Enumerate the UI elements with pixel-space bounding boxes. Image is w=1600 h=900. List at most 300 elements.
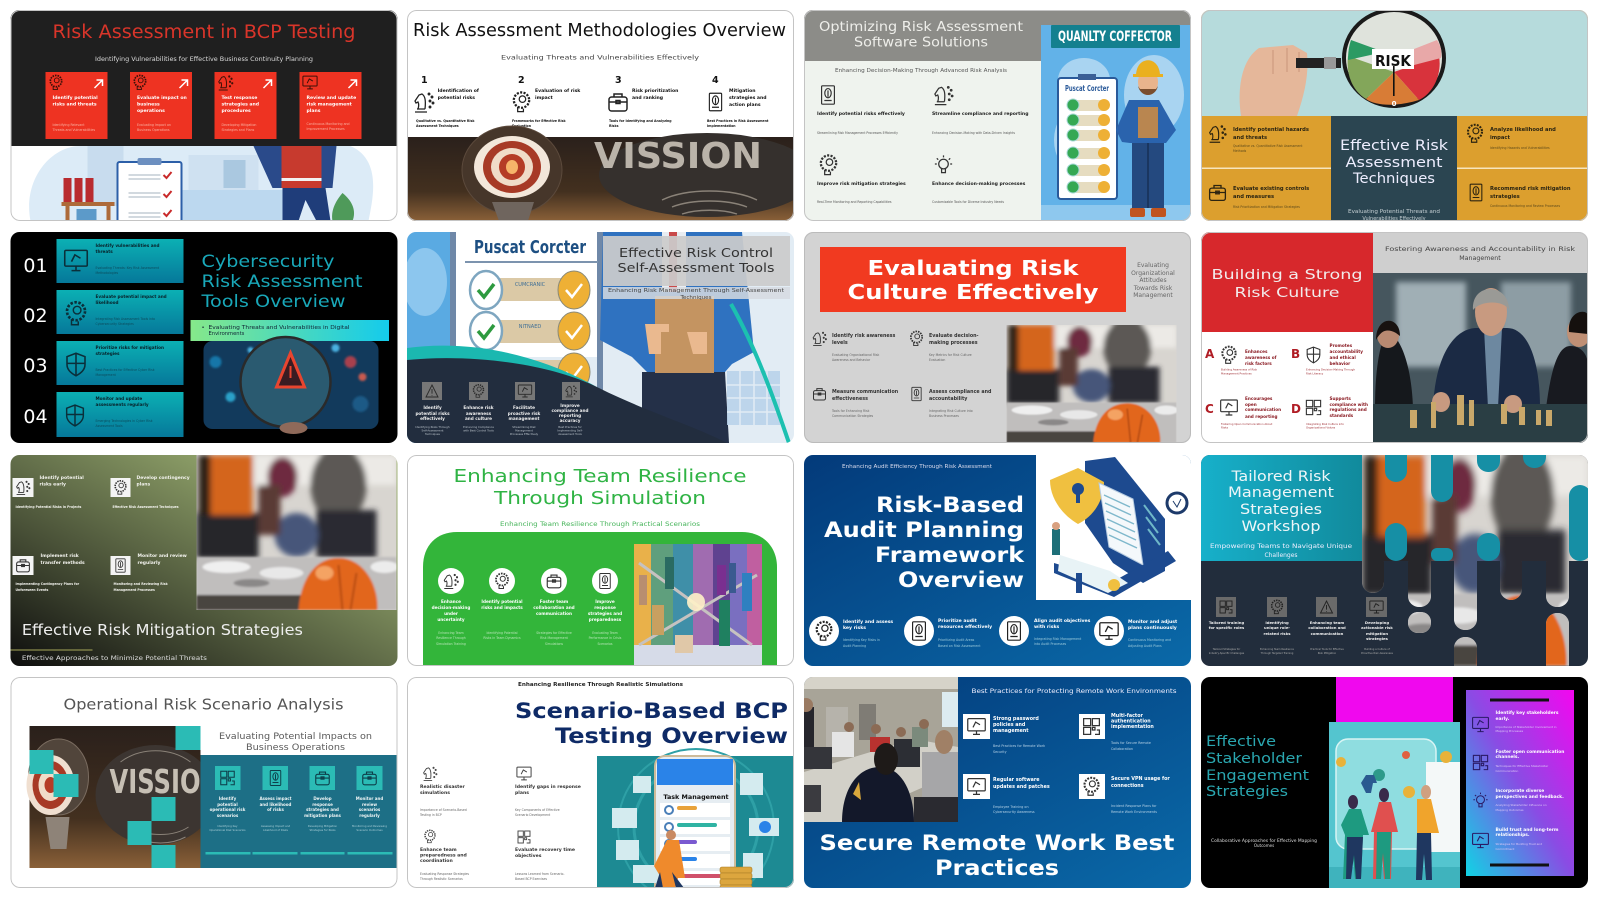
illustration: checklist: NITNAED — [519, 324, 541, 330]
workshop text: Through Targeted Training — [1261, 651, 1294, 655]
technique text: strategies — [1490, 194, 1520, 200]
step text: Operational Risk Scenarios — [209, 828, 246, 832]
lettered points: B — [1291, 347, 1300, 361]
benefit text: Real-Time Monitoring and Reporting Capabilities — [817, 200, 892, 204]
illustration: engineer with checklist: Puscat Corcter — [1065, 84, 1109, 93]
numbered tool list: Identify vulnerabilities and — [96, 243, 160, 248]
audit step text: key risks — [843, 625, 866, 631]
title: Workshop — [1242, 519, 1321, 535]
step box 1 — [46, 72, 108, 139]
tool text: Implementing Self- — [557, 428, 583, 432]
practice text: updates and patches — [993, 784, 1050, 790]
card: Evaluating Risk Culture Effectively — [804, 232, 1191, 443]
practice text: authentication — [1111, 718, 1151, 724]
numbered tool list: Cybersecurity Strategies — [96, 322, 134, 326]
workshop text: strategies — [1366, 636, 1389, 641]
title: Scenario-Based BCP — [515, 699, 788, 723]
lettered points: Management Practices — [1221, 372, 1252, 376]
scenario text: Evaluate recovery time — [515, 847, 575, 853]
step box 3: Developing Mitigation — [222, 123, 256, 127]
strategy text: Monitor and review — [138, 553, 187, 559]
strategy text: Identifying Potential Risks in Projects — [16, 505, 82, 509]
scenario text: preparedness — [589, 617, 622, 622]
strategy text: Develop contingency — [136, 475, 190, 481]
illustration: checklist: CUMCRANIC — [515, 282, 546, 288]
title: Management — [1228, 485, 1335, 501]
step box 4: risk management — [306, 102, 353, 108]
step box 4: plans — [306, 108, 321, 114]
strategy text: regularly — [138, 560, 161, 566]
numbered methods: 2 — [518, 75, 525, 86]
title: Stakeholder — [1206, 751, 1302, 767]
audit step icons — [809, 616, 1124, 646]
scenario text: Enhancing Team — [438, 631, 464, 635]
lettered points: and ethical — [1330, 355, 1356, 360]
audit step text: Prioritizing Audit Areas — [938, 638, 975, 642]
practice text: Tools for Secure Remote — [1110, 741, 1151, 745]
tool text: Self-Assessment — [422, 428, 443, 432]
scenario text: under — [444, 611, 459, 616]
practice text: Remote Work Environments — [1111, 810, 1157, 814]
card: Risk Assessment in BCP Testing — [10, 10, 398, 232]
scenario text: Scenarios — [597, 642, 613, 646]
scenario text — [432, 599, 622, 646]
tool text: Improve — [560, 403, 580, 408]
green panel — [423, 532, 777, 666]
audit step text: Continuous Monitoring and — [1128, 638, 1171, 642]
gradient action panel: Foster open communication — [1496, 749, 1564, 755]
scenario text: uncertainty — [437, 617, 465, 622]
culture text: Assess compliance and — [929, 389, 992, 395]
title: Effective Risk — [1340, 138, 1449, 154]
scenario text — [419, 784, 581, 881]
numbered methods: Risks — [609, 124, 619, 128]
teal mosaic squares — [30, 726, 200, 868]
numbered methods: strategies and — [729, 95, 767, 101]
scenario text: Resilience Through — [436, 636, 466, 640]
benefit text: Identify potential risks effectively — [817, 111, 905, 117]
audit step text: Adjusting Audit Plans — [1128, 644, 1162, 648]
card: Risk Assessment Methodologies Overview — [407, 10, 815, 221]
photo: target bulb and vision sign — [407, 126, 815, 221]
step text: strategies and — [306, 807, 339, 812]
title — [454, 466, 746, 509]
subtitle — [1348, 209, 1440, 220]
audit step text: Identify and assess — [843, 619, 893, 625]
practice text: Security — [993, 750, 1007, 754]
step box 3: Strategies and Plans — [222, 128, 255, 132]
kicker: Enhancing Audit Efficiency Through Risk Assessment — [842, 464, 992, 470]
numbered tool list — [23, 239, 184, 437]
scenario text: Performance in Crisis — [589, 636, 622, 640]
card: Effective Stakeholder Engagement Strategies — [1201, 677, 1588, 888]
title: Engagement — [1206, 768, 1310, 784]
technique text: Recommend risk mitigation — [1490, 186, 1571, 192]
illustration: checklist: Puscat Corcter — [474, 237, 586, 258]
lettered points: C — [1205, 402, 1214, 416]
numbered methods: potential risks — [438, 95, 475, 101]
highlight banner: Environments — [208, 331, 245, 337]
scenario text: Enhance team — [420, 847, 457, 853]
gradient action panel: Techniques for Effective Stakeholder — [1494, 764, 1549, 768]
lettered points: behavior — [1330, 361, 1351, 366]
scenario text: plans — [515, 790, 529, 796]
title: Risk Assessment — [202, 272, 363, 292]
numbered methods: Qualitative vs. Quantitative Risk — [416, 119, 475, 123]
tool text — [415, 403, 588, 436]
numbered methods: action plans — [729, 102, 761, 108]
scenario text: collaboration and — [533, 605, 575, 610]
numbered methods: Tools for Identifying and Analyzing — [609, 119, 672, 123]
lettered points: Integrating Risk Culture into — [1306, 422, 1344, 426]
step text: scenarios — [359, 807, 381, 812]
subtitle: Empowering Teams to Navigate Unique — [1210, 543, 1352, 550]
step box 2: Evaluating Impact on — [137, 123, 171, 127]
lettered points — [1205, 343, 1368, 430]
swoosh and dark panel — [407, 304, 789, 443]
strategy text — [16, 475, 190, 592]
workshop text: Developing — [1365, 620, 1389, 625]
numbered tool list: Management — [96, 373, 117, 377]
benefit text — [817, 111, 1028, 204]
photo: magnifier with alert triangle — [204, 337, 378, 434]
lettered points: compliance with — [1330, 402, 1368, 407]
scenario text: Evaluating Team — [592, 631, 618, 635]
tool text: and culture — [465, 416, 492, 421]
culture text: effectiveness — [832, 396, 868, 402]
scenario circles — [438, 568, 618, 594]
lettered points: Promotes — [1330, 343, 1353, 348]
scenario text: Testing in BCP — [419, 813, 442, 817]
scenario text: Foster team — [540, 599, 569, 604]
step text: Identify — [219, 796, 237, 801]
numbered tool list: 03 — [23, 355, 48, 377]
step box 2: Evaluate impact on — [137, 95, 187, 101]
numbered tool list: likelihood — [96, 300, 118, 305]
side subtitle: Attitudes — [1139, 277, 1167, 284]
photo: target bulb and vision sign: VISSION — [594, 136, 762, 177]
practice text: Strong password — [993, 716, 1039, 722]
title panel: Effective Risk Control — [619, 246, 773, 260]
numbered methods: and ranking — [632, 95, 663, 101]
title panel — [603, 236, 790, 299]
step text: of risks — [267, 807, 284, 812]
practice text: policies and — [993, 722, 1026, 728]
strategy text: Effective Risk Assessment Techniques — [112, 505, 179, 509]
lettered points: Enhances — [1245, 349, 1268, 354]
title block: Building a Strong — [1212, 268, 1362, 283]
step text — [209, 796, 387, 832]
workshop text: for specific roles — [1209, 625, 1245, 630]
numbered methods: Mitigation — [729, 88, 756, 94]
scenario text: Identifying Potential — [486, 631, 518, 635]
subtitle: Effective Approaches to Minimize Potential Threats — [22, 655, 207, 662]
gradient action panel: Analyzing Stakeholder Influence on — [1496, 803, 1547, 807]
step box 1: Identify potential — [52, 95, 98, 101]
step box 2: business — [137, 102, 160, 108]
title — [1206, 734, 1310, 800]
step box 3: Test response — [222, 95, 257, 101]
step text: operational risk — [210, 807, 246, 812]
gradient action panel: Commitment — [1496, 847, 1515, 851]
gradient action panel: Communication — [1496, 769, 1518, 773]
step box 1: risks and threats — [52, 102, 97, 108]
title — [820, 21, 1023, 46]
culture text: Communication Strategies — [832, 414, 874, 418]
step text: Monitoring and Reviewing — [352, 824, 387, 828]
title: Framework — [875, 543, 1025, 567]
photo: team in simulation — [634, 544, 762, 666]
gradient action panel: Importance of Stakeholder Involvement in — [1496, 725, 1557, 729]
scenario text: decision-making — [432, 605, 470, 610]
strategy text: Monitoring and Reviewing Risk — [114, 582, 169, 586]
title: Strategies — [1206, 784, 1288, 800]
strategy text: transfer methods — [40, 560, 85, 566]
title — [1228, 469, 1335, 535]
illustration: stakeholders shaking hands — [1329, 722, 1460, 888]
step text: Developing Mitigation — [308, 824, 338, 828]
audit step text: Based on Risk Assessment — [938, 644, 981, 648]
subtitle — [1210, 543, 1352, 559]
title: Testing Overview — [555, 724, 788, 748]
subtitle: Evaluating Potential Impacts on — [219, 732, 372, 742]
lettered points: standards — [1330, 413, 1354, 418]
photo: target bulb and vision sign: VISSIO — [110, 762, 200, 801]
audit step text: resources effectively — [938, 624, 992, 630]
workshop text: Enhancing Team Resilience — [1260, 647, 1294, 651]
subtitle: Business Operations — [246, 743, 345, 753]
audit step text: with risks — [1034, 624, 1060, 630]
side subtitle — [1131, 262, 1175, 299]
subtitle — [219, 732, 372, 753]
scenario text: preparedness and — [420, 852, 467, 858]
step text: regularly — [359, 813, 380, 818]
culture text — [831, 333, 992, 418]
technique text: Continuous Monitoring and Review Processes — [1490, 204, 1560, 208]
strategy text: Implement risk — [40, 553, 80, 559]
scenario text: Identify gaps in response — [515, 784, 581, 790]
title panel: Self-Assessment Tools — [618, 261, 774, 275]
workshop text: Identifying — [1265, 620, 1289, 625]
strategy text: Management Processes — [114, 588, 155, 592]
tool text: effectively — [420, 416, 445, 421]
subtitle: Vulnerabilities Effectively — [1362, 216, 1426, 222]
subtitle: Collaborative Approaches for Effective Mapping — [1211, 838, 1318, 843]
photo: hand with magnifier over risk gauge: 0 — [1392, 100, 1397, 108]
title: Tailored Risk — [1230, 469, 1332, 485]
numbered tool list: Emerging Technologies in Cyber Risk — [96, 419, 153, 423]
tool text: proactive risk — [508, 411, 540, 416]
title: Secure Remote Work Best — [820, 831, 1175, 855]
scenario text: simulations — [420, 790, 450, 796]
practice text: Employee Training on — [993, 805, 1029, 809]
photo: boardroom — [1373, 273, 1591, 443]
tool text: Management — [515, 428, 533, 432]
gradient action panel: perspectives and feedback. — [1496, 794, 1564, 800]
title: Effective Risk Mitigation Strategies — [22, 621, 303, 639]
lettered points: Fostering Open Communication About — [1221, 422, 1272, 426]
practice text: connections — [1111, 783, 1144, 789]
photo: training room — [799, 677, 958, 822]
scenario text: Simulation Training — [436, 642, 466, 646]
audit step text — [843, 618, 1178, 648]
step box 3 — [214, 72, 276, 139]
gradient action panel: Identify key stakeholders — [1496, 710, 1559, 716]
lettered points: regulations and — [1330, 407, 1367, 412]
step text: Strategies for Risks — [309, 828, 336, 832]
step box 3: strategies and — [222, 102, 259, 108]
practice text: Secure VPN usage for — [1111, 776, 1170, 782]
numbered tool list: 04 — [23, 406, 48, 428]
lettered points: Risk Literacy — [1306, 372, 1324, 376]
tool text: Processes Effectively — [510, 432, 538, 436]
workshop text: unique role- — [1264, 625, 1290, 630]
scenario text: Scenario Development — [515, 813, 551, 817]
numbered methods — [416, 75, 769, 128]
step box 4: Continuous Monitoring and — [306, 122, 350, 126]
lettered points: awareness of — [1245, 355, 1277, 360]
workshop text: Proactive Risk Awareness — [1361, 651, 1394, 655]
card: Effective Risk Control Self-Assessment Tools — [403, 232, 794, 443]
card: Tailored Risk Management Strategies Workshop — [1201, 443, 1591, 666]
scenario text: Evaluating Response Strategies — [420, 872, 469, 876]
lettered points: accountability — [1330, 349, 1363, 354]
numbered tool list: strategies — [96, 351, 120, 356]
tool text: Assessment Tools — [558, 432, 582, 436]
workshop text: Industry-Specific Challenges — [1209, 651, 1245, 655]
step text: Likelihood of Risks — [263, 828, 289, 832]
practice text: Best Practices for Remote Work — [993, 744, 1045, 748]
lettered points: communication — [1245, 407, 1281, 412]
culture text: Tools for Enhancing Risk — [831, 409, 870, 413]
strategy text: Implementing Contingency Plans for — [16, 582, 80, 586]
scenario text: Simulations — [545, 642, 563, 646]
illustration: engineer with checklist — [1041, 25, 1191, 221]
method icons — [415, 92, 722, 112]
illustration: engineer with checklist: QUANLTY COFFECTOR — [1058, 28, 1172, 45]
gradient action panel: Build trust and long-term — [1496, 827, 1559, 833]
technique text: and measures — [1233, 194, 1274, 200]
numbered tool list: Monitor and update — [96, 396, 142, 401]
subtitle: Evaluating Threats and Vulnerabilities Effectively — [501, 54, 699, 62]
tool text: Identify — [423, 405, 442, 410]
technique text: Evaluate existing controls — [1233, 186, 1309, 192]
step text: Develop — [313, 796, 332, 801]
step box 1: Identifying Relevant — [52, 123, 85, 127]
lettered points: Risks — [1221, 426, 1229, 430]
subtitle: Challenges — [1264, 552, 1298, 559]
tool text: Streamlining Risk — [512, 425, 536, 429]
scenario text: strategies and — [588, 611, 622, 616]
highlight banner: • — [202, 325, 205, 331]
gradient action panel: Strategies for Building Trust and — [1496, 842, 1542, 846]
title: Operational Risk Scenario Analysis — [64, 696, 344, 714]
title: Tools Overview — [200, 292, 346, 312]
title: Through Simulation — [493, 488, 706, 509]
practice icons — [963, 714, 1105, 799]
audit step text: Align audit objectives — [1034, 618, 1091, 624]
numbered methods: Evaluation — [512, 124, 532, 128]
step box 2: operations — [137, 108, 165, 114]
scenario text: Improve — [595, 599, 615, 604]
practice text: implementation — [1111, 724, 1154, 730]
title: Audit Planning — [824, 518, 1024, 542]
subtitle: Identifying Vulnerabilities for Effective Business Continuity Planning — [95, 57, 313, 63]
numbered tool list: 01 — [23, 255, 48, 277]
subtitle — [1373, 232, 1588, 273]
tool text: compliance and — [552, 408, 588, 413]
practice text — [993, 713, 1170, 814]
title — [515, 699, 788, 748]
subtitle: Outcomes — [1254, 843, 1274, 848]
subtitle: Management — [1459, 255, 1501, 262]
gradient action panel: Incorporate diverse — [1496, 788, 1544, 794]
scenario icons — [424, 767, 531, 843]
title: Cybersecurity — [202, 252, 334, 272]
title banner: Culture Effectively — [848, 280, 1098, 304]
workshop text: related risks — [1264, 631, 1291, 636]
photo: blurred workshop — [196, 447, 398, 610]
numbered methods: Assessment Techniques — [416, 124, 459, 128]
technique text: Qualitative vs. Quantitative Risk Assessment — [1233, 144, 1303, 148]
practice text: Cybersecurity Awareness — [993, 810, 1035, 814]
numbered methods: 1 — [421, 75, 428, 86]
scenario text: Key Components of Effective — [515, 808, 560, 812]
strategy text: Identify potential — [40, 475, 84, 481]
step text: mitigation plans — [304, 813, 342, 818]
illustration: phone task management: Task Management — [663, 793, 729, 801]
tool text: Techniques — [424, 432, 441, 436]
teal info panel — [200, 755, 398, 868]
scenario text: Through Realistic Scenarios — [419, 877, 463, 881]
side subtitle: Evaluating — [1137, 262, 1169, 269]
numbered tool list: Integrating Risk Assessment Tools into — [96, 317, 155, 321]
tool text: awareness — [466, 411, 492, 416]
scenario text: Lessons Learned from Scenario- — [515, 872, 565, 876]
workshop text: Enhancing team — [1310, 620, 1344, 625]
tool text: Facilitate — [513, 405, 535, 410]
illustration: clipboard and inspector — [29, 146, 374, 220]
photo: target bulb and vision sign — [26, 726, 216, 868]
practice text: management — [993, 728, 1029, 734]
benefit text: Improve risk mitigation strategies — [817, 181, 906, 187]
benefit text: Customizable Tools for Diverse Industry Needs — [932, 200, 1004, 204]
culture text: Awareness and Behavior — [832, 358, 871, 362]
lettered points: Enhancing Decision-Making Through — [1306, 368, 1355, 372]
numbered methods: Implementation — [707, 124, 736, 128]
magenta accent block — [1336, 677, 1453, 723]
numbered tool list: 02 — [23, 305, 48, 327]
card: Effective Risk Assessment Techniques — [1201, 10, 1588, 222]
title: Risk Assessment Methodologies Overview — [413, 21, 786, 41]
center panel — [1331, 116, 1457, 221]
numbered methods: Evaluation of risk — [535, 88, 581, 94]
gradient action panel: channels. — [1496, 754, 1520, 760]
card: Building a Strong Risk Culture — [1201, 232, 1591, 443]
title — [824, 493, 1025, 592]
tool text: with Best Control Tools — [463, 428, 494, 432]
culture text: making processes — [929, 340, 978, 346]
side icons — [1210, 125, 1482, 201]
lettered points: risk factors — [1245, 361, 1272, 366]
tool text: reporting — [559, 413, 581, 418]
numbered methods: 4 — [712, 75, 719, 86]
tool text: Enhancing Compliance — [463, 425, 494, 429]
title — [1340, 138, 1449, 187]
heading: Best Practices for Protecting Remote Work Environments — [972, 687, 1177, 695]
title banner: Evaluating Risk — [868, 256, 1079, 280]
title block: Risk Culture — [1234, 286, 1340, 301]
